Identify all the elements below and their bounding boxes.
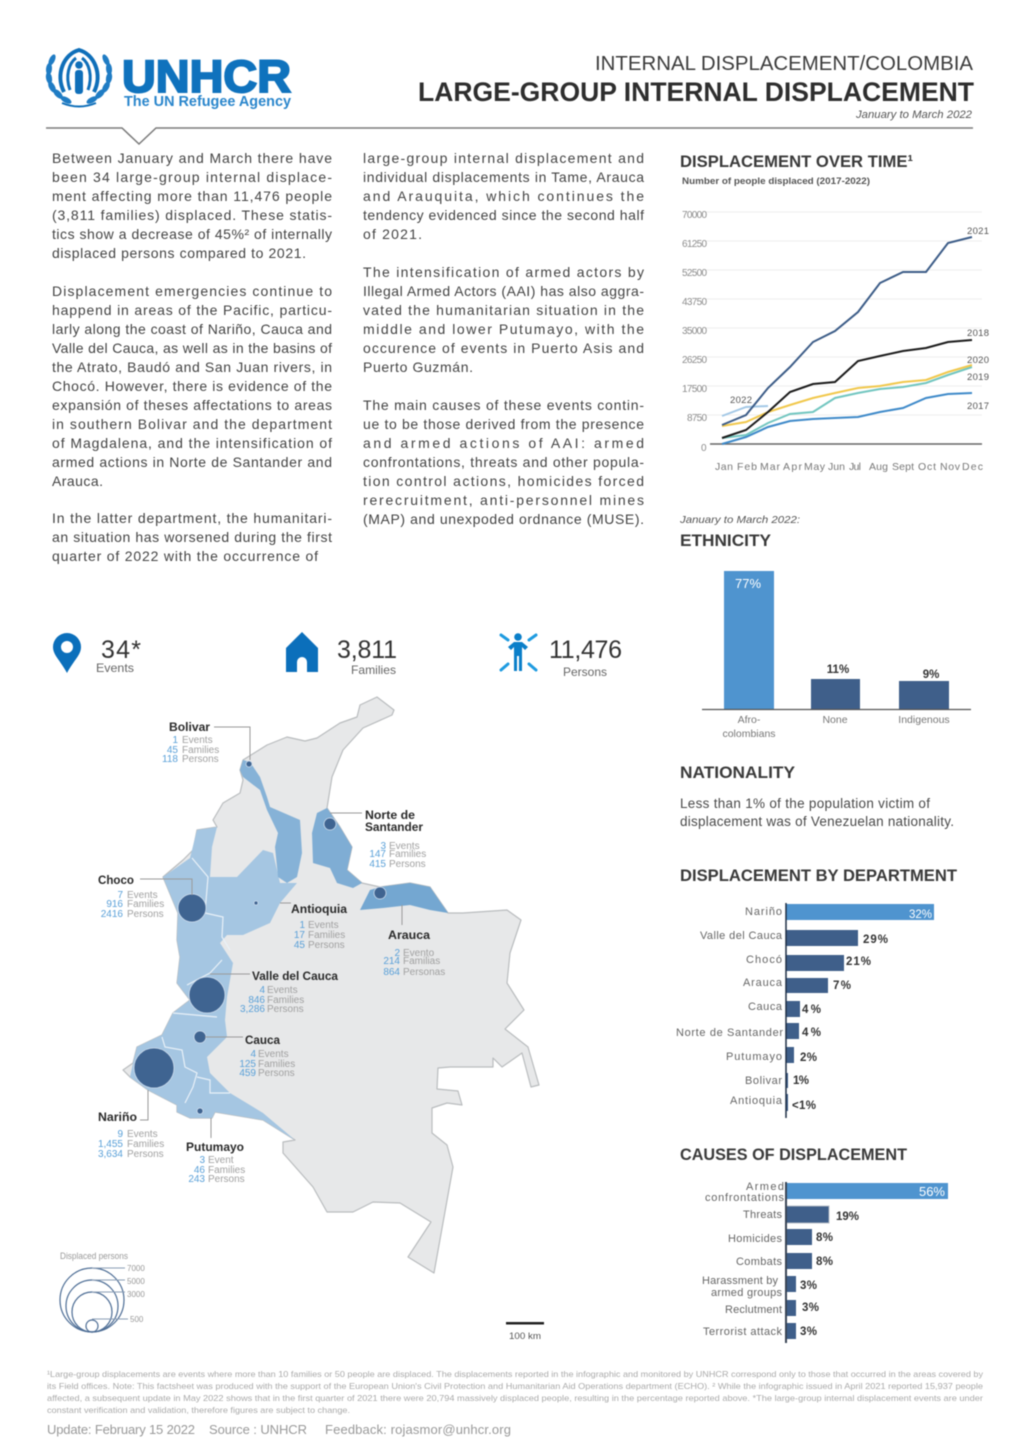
leader lines: [140, 727, 402, 1138]
x axis labels: Nov: [940, 461, 961, 473]
bar chart: Indigenous: [898, 714, 950, 726]
legend title: Displaced persons: [60, 1251, 128, 1261]
text column 2: tion control actions, homicides forced: [363, 473, 644, 489]
icon: UNHCR emblem: [45, 50, 113, 106]
scale bar: [506, 1322, 544, 1342]
label: Valle del Cauca: 846: [248, 995, 265, 1006]
label: Norte de Santander: [365, 808, 426, 870]
values: 1%: [793, 1075, 809, 1087]
values: 4%: [802, 1027, 821, 1039]
category labels: Harassment by: [702, 1275, 778, 1287]
label: Cauca: Events: [258, 1049, 289, 1060]
value: 3,811: [337, 636, 397, 664]
footer: [47, 1422, 511, 1437]
legend values: 500: [130, 1315, 144, 1324]
label: Putumayo: [186, 1140, 245, 1185]
series labels: 2021: [967, 226, 989, 237]
heading: NATIONALITY: [680, 763, 796, 782]
nested circles: [60, 1268, 128, 1332]
values: 2%: [800, 1052, 817, 1064]
label: Choco: [98, 873, 164, 920]
text column 1: quarter of 2022 with the occurrence of: [52, 548, 318, 564]
panel: ethnicity: [679, 514, 971, 740]
label: Putumayo: Persons: [208, 1174, 245, 1185]
label: Choco: 2416: [101, 909, 123, 920]
x axis labels: May: [804, 461, 826, 473]
y axis labels: 35000: [682, 326, 707, 337]
category labels: Putumayo: [726, 1051, 782, 1063]
label: Cauca: Families: [258, 1059, 295, 1070]
region: Bolivar: [240, 760, 302, 883]
text column 1: happend in areas of the Pacific, particu-: [52, 302, 332, 318]
label: Norte de Santander: Events: [389, 841, 420, 852]
values: 8%: [816, 1232, 833, 1244]
x axis labels: Jan: [715, 461, 733, 473]
bar chart: 77%: [735, 576, 761, 591]
country outline: [123, 697, 539, 1273]
logo: UNHCR: [45, 50, 291, 110]
category labels: armed groups: [711, 1287, 782, 1299]
text column 2: The intensification of armed actors by: [363, 264, 644, 280]
label: Arauca: Personas: [403, 967, 445, 978]
label: Valle del Cauca: [240, 969, 338, 1015]
label: Events: [96, 661, 134, 675]
values: 3%: [802, 1302, 819, 1314]
label: Bolivar: Families: [182, 745, 219, 756]
y axis labels: 61250: [682, 239, 707, 250]
text column 2: of 2021.: [363, 226, 422, 242]
footer: Update: February 15 2022: [47, 1422, 195, 1437]
label: Valle del Cauca: Events: [267, 985, 298, 996]
y axis labels: 26250: [682, 355, 707, 366]
x axis labels: Jun: [828, 461, 845, 473]
date: January to March 2022:: [679, 514, 800, 526]
values: 3%: [800, 1280, 817, 1292]
label: Putumayo: 243: [188, 1174, 205, 1185]
text column 2: and armed actions of AAI: armed: [363, 435, 644, 451]
text column 1: [52, 150, 332, 564]
footnote: constant verification and validation, therefore figures are subject to change.: [47, 1405, 350, 1415]
label: Antioquia: Families: [308, 930, 345, 941]
y axis labels: [682, 210, 707, 454]
label: Antioquia: Antioquia: [291, 902, 347, 916]
label: Bolivar: [162, 720, 219, 765]
footnote: its Field offices. Note: This factsheet was produced with the support of the European Union's Civil Protection and Humanitarian Aid Operations department (ECHO). ² While the infographic issued in April 2021 reported 15,937 people: [47, 1381, 983, 1391]
category labels: Cauca: [748, 1001, 783, 1013]
label: Cauca: 459: [239, 1068, 256, 1079]
text column 1: Chocó. However, there is evidence of the: [52, 378, 332, 394]
values: 7%: [833, 980, 851, 992]
label: Choco: Events: [127, 890, 158, 901]
line 2017: [722, 393, 972, 444]
category labels: [702, 1181, 784, 1338]
label: Putumayo: Putumayo: [186, 1140, 244, 1154]
x axis labels: Apr: [783, 461, 802, 473]
text column 1: (3,811 families) displaced. These statis-: [52, 207, 332, 223]
label: Cauca: Persons: [258, 1068, 295, 1079]
main title: LARGE-GROUP INTERNAL DISPLACEMENT: [418, 77, 974, 107]
label: Nariño: Families: [127, 1139, 164, 1150]
category labels: Bolivar: [745, 1075, 782, 1087]
text column 2: tendency evidenced since the second half: [363, 207, 644, 223]
label: Putumayo: 3: [199, 1155, 205, 1166]
label: Nariño: 9: [117, 1129, 123, 1140]
category labels: Arauca: [743, 977, 783, 989]
label: Valle del Cauca: 3,286: [240, 1004, 265, 1015]
icon: map pin: [53, 633, 81, 673]
series labels: 2017: [967, 401, 989, 412]
footnote: affected, a subsequent update in May 2022 shows that in the first quarter of 2021 there were 20,794 massively displaced people, resulting in the percentage reported above. *The large-group internal displacement events are under: [47, 1393, 983, 1403]
label: Antioquia: Events: [308, 920, 339, 931]
label: Norte de Santander: 147: [369, 849, 386, 860]
y axis labels: 70000: [682, 210, 707, 221]
values: 56%: [919, 1184, 945, 1199]
values: 8%: [816, 1256, 833, 1268]
text column 2: occurence of events in Puerto Asis and: [363, 340, 644, 356]
label: Antioquia: [291, 902, 347, 951]
label: Choco: Families: [127, 899, 164, 910]
label: Persons: [563, 665, 607, 679]
text: Less than 1% of the population victim of: [680, 796, 930, 811]
heading: CAUSES OF DISPLACEMENT: [680, 1145, 908, 1164]
bar chart: [702, 571, 971, 740]
label: Choco: Choco: [98, 873, 134, 887]
label: Putumayo: Event: [208, 1155, 234, 1166]
y axis labels: 17500: [682, 384, 707, 395]
bar chart: 11%: [827, 664, 849, 676]
x axis labels: Mar: [760, 461, 780, 473]
panel: displacement over time: [680, 152, 989, 473]
text column 1: Valle del Cauca, as well as in the basins of: [52, 340, 332, 356]
text column 1: an situation has worsened during the first: [52, 529, 332, 545]
label: Valle del Cauca: Valle del Cauca: [252, 969, 338, 983]
label: Bolivar: Bolivar: [169, 720, 210, 734]
heading: DISPLACEMENT OVER TIME¹: [680, 152, 913, 171]
x axis labels: Oct: [918, 461, 936, 473]
text column 2: middle and lower Putumayo, with the: [363, 321, 644, 337]
scale bar: 100 km: [509, 1331, 541, 1342]
text column 2: individual displacements in Tame, Arauca: [363, 169, 644, 185]
heading: ETHNICITY: [680, 531, 772, 550]
label: Norte de Santander: 415: [369, 859, 386, 870]
label: Choco: 916: [106, 899, 123, 910]
label: Valle del Cauca: 4: [259, 985, 265, 996]
footnote: [47, 1369, 984, 1415]
category labels: Homicides: [728, 1233, 782, 1245]
label: Nariño: Events: [127, 1129, 158, 1140]
label: Arauca: 2: [394, 948, 400, 959]
bar chart: None: [822, 714, 848, 726]
y axis labels: 0: [701, 443, 707, 454]
title block: [418, 52, 974, 121]
text column 1: been 34 large-group internal displace-: [52, 169, 332, 185]
series labels: 2022: [730, 395, 752, 406]
region: Arauca: [360, 883, 448, 913]
text column 2: large-group internal displacement and: [363, 150, 644, 166]
value: 11,476: [549, 636, 622, 664]
tagline: The UN Refugee Agency: [124, 94, 291, 110]
bar chart: colombians: [722, 728, 776, 740]
series labels: [730, 226, 989, 412]
label: Arauca: Familias: [403, 956, 440, 967]
line 2021: [722, 237, 972, 425]
x axis labels: Feb: [737, 461, 757, 473]
bar chart: Afro-: [738, 714, 761, 726]
stat: families: [286, 632, 397, 677]
label: Antioquia: 17: [294, 930, 305, 941]
supertitle: INTERNAL DISPLACEMENT/COLOMBIA: [595, 52, 973, 75]
label: Antioquia: Persons: [308, 940, 345, 951]
text column 1: Displacement emergencies continue to: [52, 283, 332, 299]
values: 32%: [909, 909, 932, 921]
label: Nariño: Nariño: [98, 1110, 137, 1124]
text column 2: [363, 150, 644, 527]
text column 1: tics show a decrease of 45%² of internally: [52, 226, 332, 242]
x axis labels: Jul: [849, 461, 861, 473]
label: Norte de Santander: 3: [380, 841, 386, 852]
values: [792, 909, 932, 1112]
text column 1: Between January and March there have: [52, 150, 332, 166]
category labels: Chocó: [746, 954, 782, 966]
text column 2: confrontations, threats and other popula-: [363, 454, 644, 470]
label: Cauca: 125: [239, 1059, 256, 1070]
panel: nationality: displacement was of Venezuelan nationality.: [680, 814, 954, 829]
text column 2: Puerto Guzmán.: [363, 359, 473, 375]
line 2018: [722, 340, 972, 438]
series labels: 2020: [967, 355, 989, 366]
category labels: Norte de Santander: [676, 1027, 783, 1039]
header rule with notch: [46, 128, 973, 144]
legend values: 3000: [127, 1290, 145, 1299]
line 2020: [722, 365, 972, 426]
category labels: Antioquia: [730, 1095, 783, 1107]
icon: person with rays: [501, 633, 536, 671]
category labels: Armed: [746, 1181, 784, 1193]
label: Bolivar: 1: [172, 735, 178, 746]
x axis labels: Aug: [869, 461, 888, 473]
bars: [786, 1182, 948, 1343]
y axis labels: 8750: [687, 413, 707, 424]
legend values: [127, 1264, 145, 1324]
label: Arauca: Evento: [403, 948, 435, 959]
label: Bolivar: Events: [182, 735, 213, 746]
text column 1: the Atrato, Baudó and San Juan rivers, in: [52, 359, 332, 375]
text column 1: armed actions in Norte de Santander and: [52, 454, 332, 470]
label: Bolivar: 45: [167, 745, 178, 756]
y axis labels: 43750: [682, 297, 707, 308]
category labels: Nariño: [745, 906, 782, 918]
label: Antioquia: 45: [294, 940, 305, 951]
label: Arauca: 214: [383, 956, 400, 967]
category labels: Threats: [743, 1209, 782, 1221]
map of Colombia: [98, 697, 539, 1273]
text column 1: In the latter department, the humanitari-: [52, 510, 332, 526]
gridlines: [705, 212, 982, 444]
label: Arauca: [383, 928, 445, 978]
legend values: 7000: [127, 1264, 145, 1273]
values: 19%: [836, 1211, 859, 1223]
label: Arauca: Arauca: [388, 928, 430, 942]
label: Nariño: Persons: [127, 1149, 164, 1160]
label: Bolivar: 118: [162, 754, 178, 765]
text column 1: of Magdalena, and the intensification of: [52, 435, 332, 451]
label: Antioquia: 1: [299, 920, 305, 931]
category labels: confrontations: [705, 1192, 784, 1204]
label: Families: [351, 663, 396, 677]
category labels: Combats: [736, 1256, 782, 1268]
y axis labels: 52500: [682, 268, 707, 279]
legend: displaced persons: [60, 1251, 145, 1332]
text column 1: Arauca.: [52, 473, 103, 489]
label: Valle del Cauca: Persons: [267, 1004, 304, 1015]
label: Norte de Santander: Norte de: [365, 808, 415, 822]
text column 2: (MAP) and unexpoded ordnance (MUSE).: [363, 511, 644, 527]
label: Cauca: [239, 1033, 295, 1079]
label: Valle del Cauca: Families: [267, 995, 304, 1006]
text column 2: and Arauquita, which continues the: [363, 188, 644, 204]
bars: [786, 903, 934, 1118]
footer: Feedback: rojasmor@unhcr.org: [325, 1422, 511, 1437]
label: Cauca: 4: [250, 1049, 256, 1060]
text column 2: rerecruitment, anti-personnel mines: [363, 492, 644, 508]
footer: Source : UNHCR: [209, 1422, 307, 1437]
region: Pacific departments: [130, 827, 297, 1140]
x axis labels: Sept: [892, 461, 914, 473]
label: Norte de Santander: Santander: [365, 820, 423, 834]
label: Nariño: [98, 1110, 164, 1160]
category labels: Terrorist attack: [703, 1326, 782, 1338]
icon: house: [286, 632, 318, 672]
values: 4%: [802, 1004, 821, 1016]
date: January to March 2022: [855, 109, 972, 121]
line 2019: [722, 367, 972, 438]
legend values: 5000: [127, 1277, 145, 1286]
proportional circles: [134, 761, 386, 1114]
label: Choco: 7: [117, 890, 123, 901]
text column 2: ue to be those derived from the presence: [363, 416, 644, 432]
panel: displacement by department: [676, 866, 958, 1118]
label: Cauca: Cauca: [245, 1033, 280, 1047]
text column 2: Illegal Armed Actors (AAI) has also aggra-: [363, 283, 644, 299]
label: Nariño: 3,634: [98, 1149, 123, 1160]
bar chart: 9%: [923, 669, 939, 681]
stat: persons: [501, 633, 622, 679]
text column 1: in southern Bolivar and the department: [52, 416, 332, 432]
department boundaries: [162, 858, 230, 1103]
label: Nariño: 1,455: [98, 1139, 123, 1150]
text column 2: vated the humanitarian situation in the: [363, 302, 644, 318]
category labels: Valle del Cauca: [700, 930, 783, 942]
text column 1: larly along the coast of Nariño, Cauca and: [52, 321, 332, 337]
label: Putumayo: 46: [194, 1165, 205, 1176]
panel: causes of displacement: [680, 1145, 948, 1343]
stat: events: [53, 633, 141, 675]
label: Arauca: 864: [383, 967, 400, 978]
label: Putumayo: Families: [208, 1165, 245, 1176]
category labels: [676, 906, 783, 1107]
label: Bolivar: Persons: [182, 754, 219, 765]
label: Norte de Santander: Persons: [389, 859, 426, 870]
subheading: Number of people displaced (2017-2022): [682, 176, 870, 187]
value: 34*: [101, 636, 141, 664]
values: 21%: [846, 956, 871, 968]
heading: DISPLACEMENT BY DEPARTMENT: [680, 866, 958, 885]
panel: nationality: [680, 763, 954, 829]
values: <1%: [792, 1100, 816, 1112]
label: Norte de Santander: Families: [389, 849, 426, 860]
text column 2: The main causes of these events contin-: [363, 397, 644, 413]
line 2022: [722, 406, 768, 416]
series labels: 2019: [967, 372, 989, 383]
footnote: ¹Large-group displacements are events where more than 10 families or 50 people are displaced. The displacements reported in the infographic and monitored by UNHCR correspond only to those that occurred in the areas covered by: [47, 1369, 984, 1379]
values: 29%: [863, 934, 888, 946]
wordmark: UNHCR: [122, 51, 291, 102]
text column 1: displaced persons compared to 2021.: [52, 245, 306, 261]
category labels: Reclutment: [725, 1304, 782, 1316]
region: Norte de Santander: [312, 808, 362, 888]
x axis labels: [715, 461, 983, 473]
values: 3%: [800, 1326, 817, 1338]
series labels: 2018: [967, 328, 989, 339]
text column 1: ment affecting more than 11,476 people: [52, 188, 332, 204]
x axis labels: Dec: [962, 461, 983, 473]
label: Choco: Persons: [127, 909, 164, 920]
values: [800, 1184, 945, 1338]
text column 1: expansión of theses affectations to areas: [52, 397, 332, 413]
